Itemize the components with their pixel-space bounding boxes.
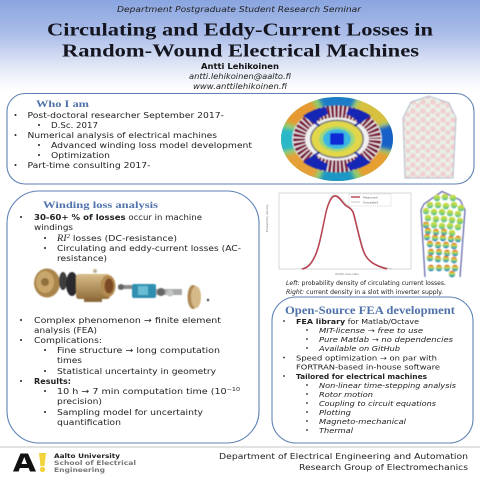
winding text before image: resistance) xyxy=(57,253,107,263)
author block xyxy=(189,62,291,91)
FEA bullet list: Available on GitHub xyxy=(318,344,400,353)
FEA bullet list: Rotor motion xyxy=(319,390,374,399)
FEA bullet list: FEA library for Matlab/Octave xyxy=(296,317,420,326)
footer department text: Research Group of Electromechanics xyxy=(299,462,468,472)
image: machine flux density xyxy=(281,97,393,181)
who I am bullet list: Part-time consulting 2017- xyxy=(28,160,150,170)
flux teeth ring xyxy=(292,106,382,172)
author block: www.anttilehikoinen.fi xyxy=(193,82,287,91)
winding text after image: Fine structure → long computation xyxy=(57,345,220,355)
logo mark xyxy=(13,453,46,472)
winding text after image: Complications: xyxy=(34,335,102,345)
winding text before image: RI xyxy=(56,233,68,243)
winding text after image: Complex phenomenon → finite element xyxy=(34,315,222,325)
who I am bullet list xyxy=(14,110,253,170)
header background gradient xyxy=(0,0,480,90)
winding text after image: Sampling model for uncertainty xyxy=(57,407,203,417)
who I am bullet list: Numerical analysis of electrical machines xyxy=(28,130,217,140)
panel: who I am xyxy=(7,94,474,184)
winding text after image: precision) xyxy=(57,396,102,406)
logo text: Aalto University xyxy=(54,453,120,460)
heading: who I am: Who I am xyxy=(36,100,89,110)
winding text after image: times xyxy=(57,355,82,365)
winding text after image: quantification xyxy=(57,417,121,427)
FEA bullet list: Thermal xyxy=(319,426,353,435)
FEA bullet list: Speed optimization → on par with xyxy=(296,354,437,362)
panel: open-source FEA development xyxy=(272,297,473,443)
winding text before image: windings xyxy=(34,222,73,232)
FEA bullet list: Plotting xyxy=(319,408,352,417)
chart legend: Simulated xyxy=(363,200,378,204)
FEA bullet list xyxy=(283,317,456,435)
FEA bullet list: MIT-license → free to use xyxy=(319,326,424,335)
footer department text xyxy=(219,451,468,472)
chart: probability density xyxy=(265,193,411,276)
image: slot cross-section xyxy=(403,96,456,178)
chart: probability density: Probability density xyxy=(265,204,269,232)
flux outer ring xyxy=(281,97,393,181)
heading: winding loss analysis: Winding loss analysis xyxy=(43,201,158,211)
winding text before image: Circulating and eddy-current losses (AC- xyxy=(57,243,241,253)
author block: antti.lehikoinen@aalto.fi xyxy=(189,72,291,81)
winding text before image: 30-60+ % of losses occur in machine xyxy=(34,212,202,222)
chart: probability density: AC/DC loss ratio xyxy=(335,272,359,276)
chart legend xyxy=(349,194,391,206)
winding text after image: 10 h → 7 min computation time (10 xyxy=(57,386,204,396)
chart legend: Measured xyxy=(363,196,378,200)
panel: winding loss analysis xyxy=(7,191,259,443)
who I am bullet list: D.Sc. 2017 xyxy=(51,120,98,130)
heading: open-source FEA development: Open-Source FEA development xyxy=(285,305,455,317)
winding text after image: −10 xyxy=(227,387,241,393)
seminar name: Department Postgraduate Student Research Seminar xyxy=(117,5,362,14)
FEA bullet list: Tailored for electrical machines xyxy=(296,372,427,381)
FEA bullet list: Magneto-mechanical xyxy=(319,417,406,426)
flux inner rotor xyxy=(312,121,362,157)
caption: Left: probability density of circulating current losses. xyxy=(286,279,446,287)
FEA bullet list: Pure Matlab → no dependencies xyxy=(319,335,453,344)
FEA bullet list: Non-linear time-stepping analysis xyxy=(319,381,456,390)
logo text: School of Electrical xyxy=(54,460,136,467)
image: exploded motor xyxy=(34,268,209,309)
footer department text: Department of Electrical Engineering and Automation xyxy=(219,451,468,461)
FEA bullet list: Coupling to circuit equations xyxy=(319,399,436,408)
FEA bullet list: FORTRAN-based in-house software xyxy=(296,362,441,372)
winding text before image: 2 xyxy=(67,234,70,240)
winding text before image: losses (DC-resistance) xyxy=(70,233,177,243)
title: Circulating and Eddy-Current Losses in xyxy=(47,20,433,40)
title xyxy=(47,20,433,60)
logo text xyxy=(54,453,136,474)
winding text after image: Statistical uncertainty in geometry xyxy=(57,366,216,376)
who I am bullet list: Optimization xyxy=(51,150,110,160)
title: Random-Wound Electrical Machines xyxy=(62,40,419,60)
who I am bullet list: Post-doctoral researcher September 2017- xyxy=(28,110,224,120)
logo: Aalto University xyxy=(13,453,136,474)
winding text before image xyxy=(20,212,241,263)
who I am bullet list: Advanced winding loss model development xyxy=(51,140,253,150)
image: slot current density xyxy=(421,192,465,277)
winding text after image xyxy=(20,315,241,427)
winding text after image: analysis (FEA) xyxy=(34,325,97,335)
winding text after image: Results: xyxy=(34,376,71,386)
author block: Antti Lehikoinen xyxy=(201,62,279,71)
logo text: Engineering xyxy=(54,467,105,474)
footer divider xyxy=(0,446,480,448)
caption: Right: current density in a slot with inverter supply. xyxy=(286,288,443,296)
caption xyxy=(286,279,446,296)
